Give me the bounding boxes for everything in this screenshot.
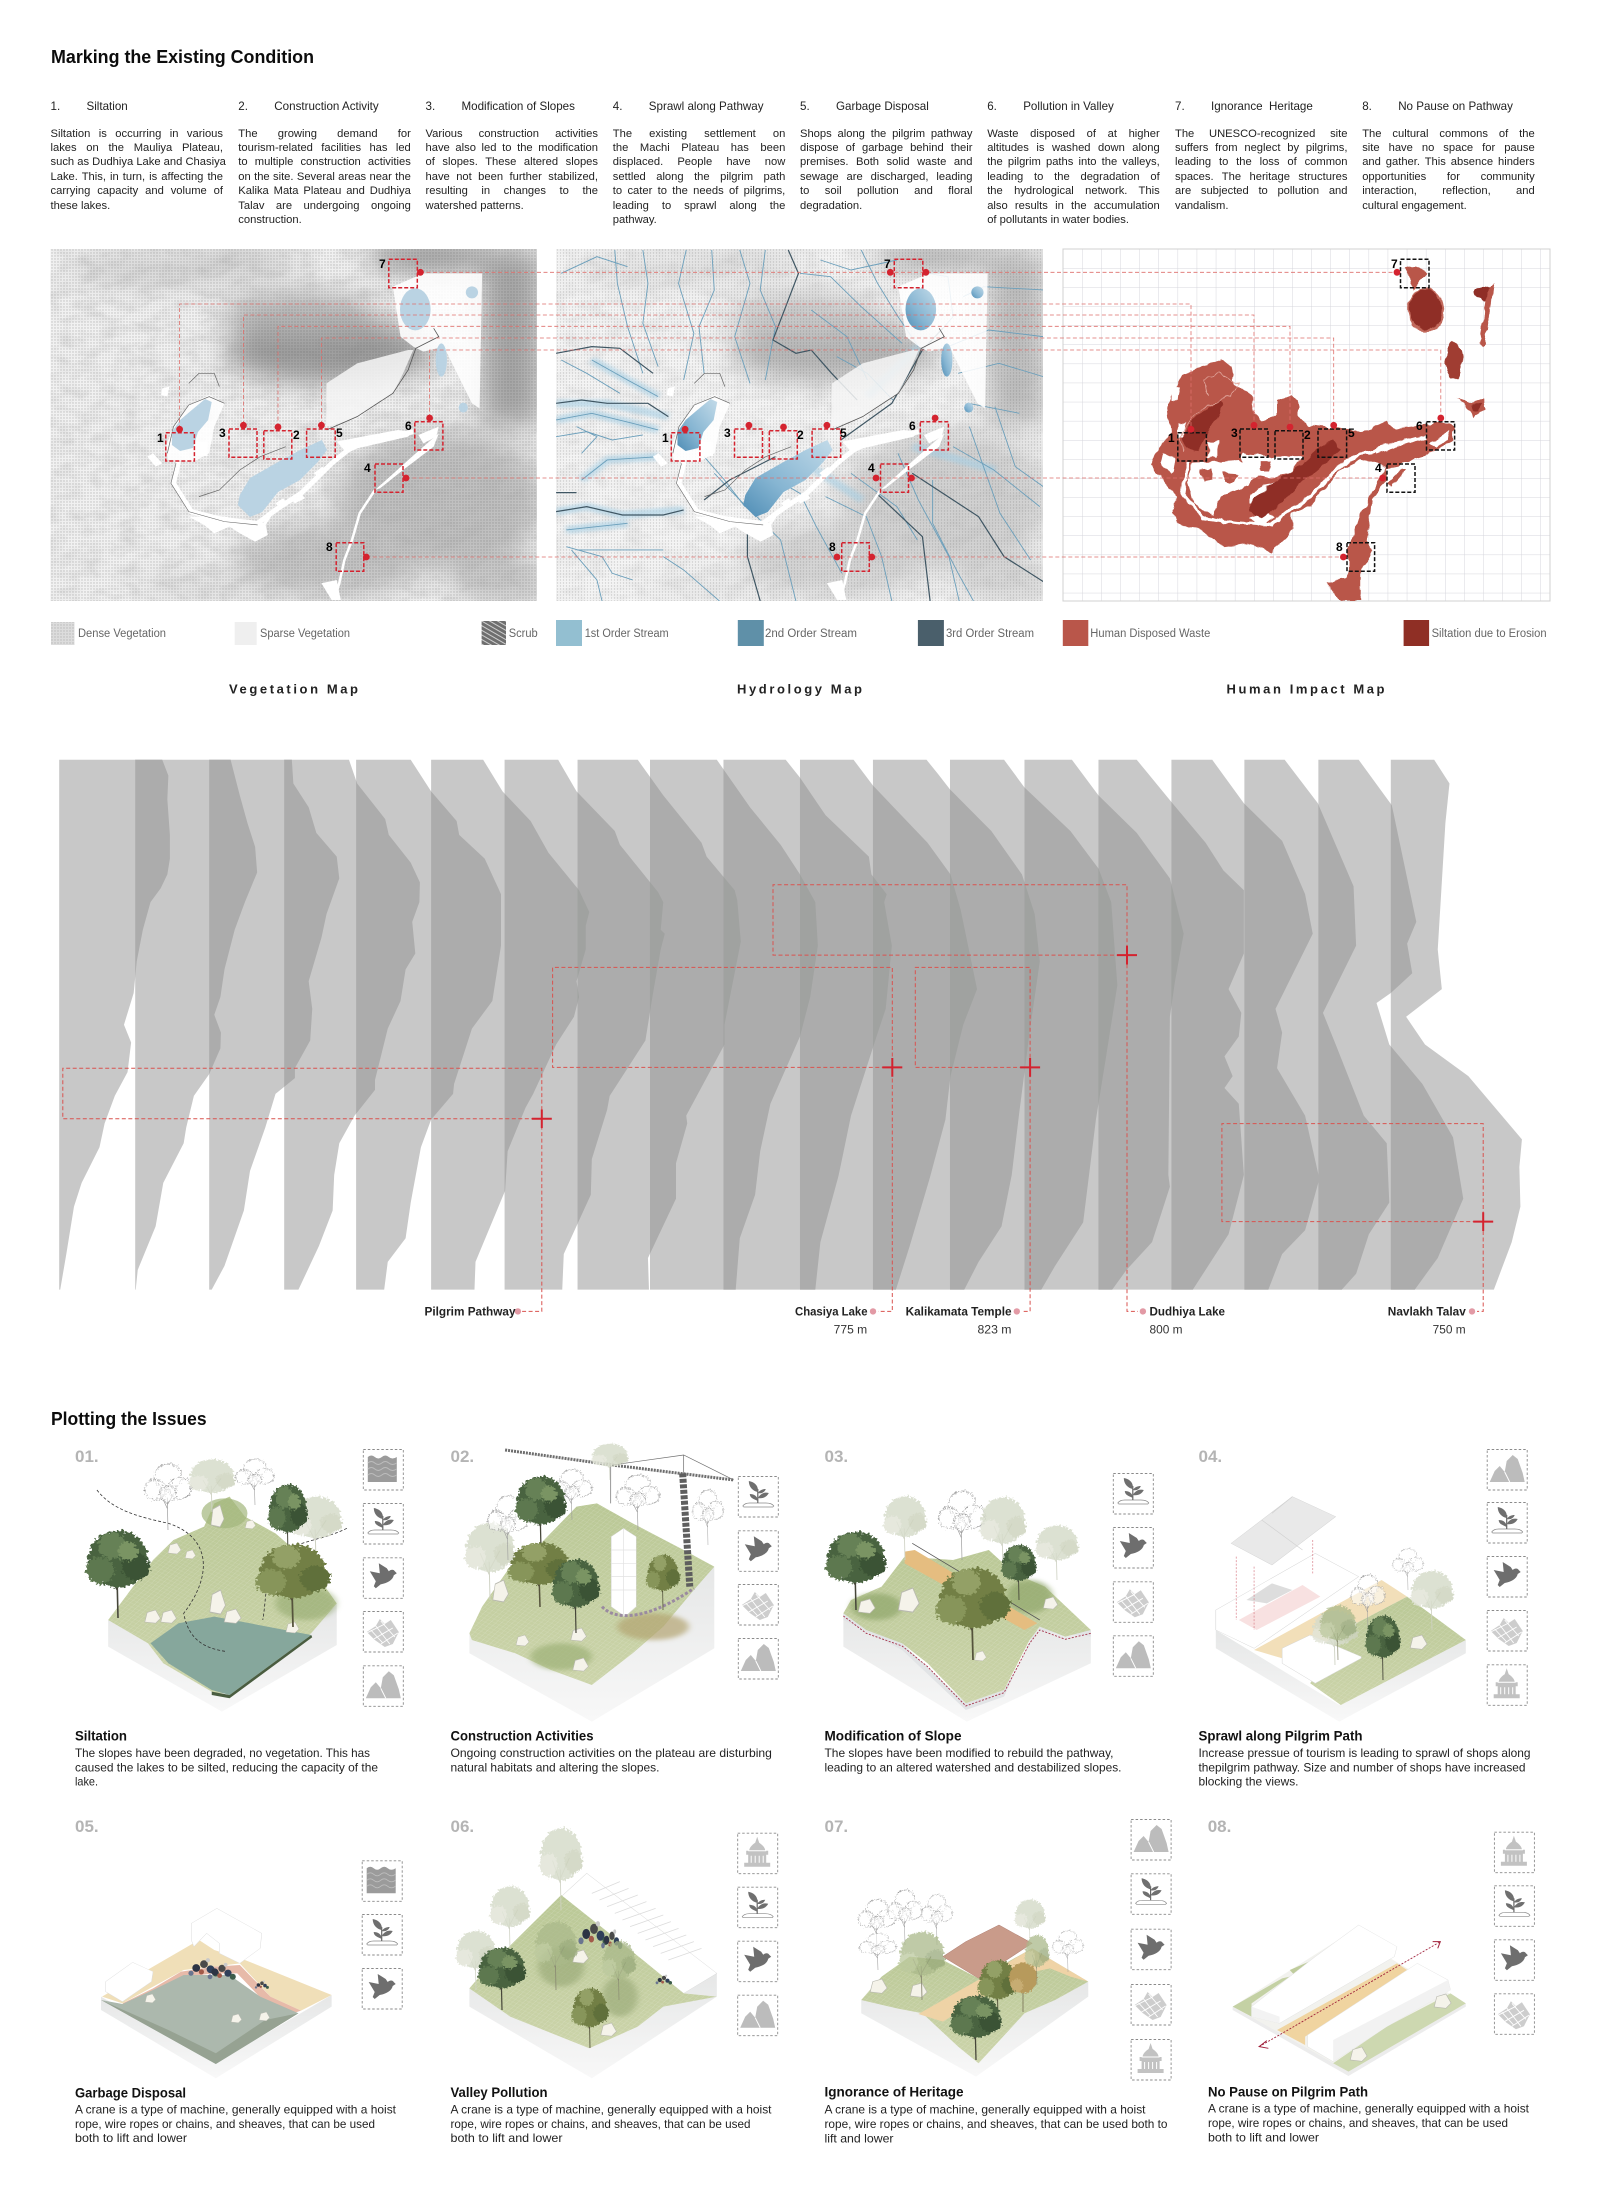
caption: valley pollution: Valley Pollution: [450, 2084, 548, 2100]
text column 8: no pause on pathway: site have no space for pause: [1362, 142, 1535, 154]
panel: 07 ignorance of heritage: [824, 1817, 1171, 2146]
text column 3: modification of slopes: watershed patterns.: [426, 200, 524, 212]
text column 1: siltation: these lakes.: [50, 200, 110, 212]
map titles: Vegetation Map: [229, 682, 360, 696]
legend: dense vegetation: [51, 622, 166, 645]
text column 6: pollution in valley: leading to the degradation of: [987, 171, 1160, 183]
illustration: valley block: [456, 1828, 717, 2078]
caption: sprawl along pilgrim path: [1198, 1728, 1530, 1789]
map markers: hydrology map: 1: [662, 431, 669, 445]
text column 2: construction activity: Construction Activity: [274, 100, 379, 113]
map markers: human impact map: 4: [1375, 461, 1382, 475]
text column 6: pollution in valley: [987, 100, 1160, 226]
map markers: vegetation map: [157, 257, 443, 571]
map markers: human impact map: 2: [1304, 428, 1311, 442]
caption: garbage disposal: both to lift and lower: [75, 2132, 187, 2145]
text column 7: ignorance heritage: The UNESCO-recognized site: [1175, 128, 1348, 140]
text column 2: construction activity: to multiple construction activities: [238, 156, 411, 168]
caption: modification of slope: leading to an altered watershed and destabilized slopes.: [824, 1761, 1122, 1774]
text column 4: sprawl along pathway: Sprawl along Pathway: [649, 100, 764, 113]
panel: 05 garbage disposal: 05.: [75, 1817, 99, 1836]
section label: kalikamata temple: 823 m: [978, 1324, 1012, 1336]
legend: human disposed waste: Human Disposed Waste: [1090, 628, 1210, 640]
text column 3: modification of slopes: Modification of Slopes: [462, 100, 575, 113]
text column 8: no pause on pathway: The cultural commons of the: [1362, 128, 1535, 140]
section label: dudhiya lake: Dudhiya Lake: [1150, 1306, 1225, 1318]
caption: modification of slope: [824, 1728, 1122, 1774]
map markers: vegetation map: 5: [336, 426, 343, 440]
text column 4: sprawl along pathway: the Machi Plateau has been: [613, 142, 785, 154]
text column 2: construction activity: 2.: [238, 100, 248, 113]
icons: impact categories: [738, 1833, 778, 2036]
illustration: construction block with crane: [465, 1444, 734, 1722]
text column 5: garbage disposal: Garbage Disposal: [836, 100, 929, 113]
legend: 3rd order stream: 3rd Order Stream: [946, 628, 1034, 640]
map markers: hydrology map: 5: [840, 426, 847, 440]
text column 8: no pause on pathway: [1362, 100, 1535, 212]
text column 2: construction activity: construction.: [238, 214, 302, 226]
map markers: human impact map: 6: [1416, 419, 1423, 433]
legend: scrub: [482, 621, 538, 645]
map markers: human impact map: 8: [1336, 540, 1343, 554]
legend: [51, 620, 1547, 646]
section label: chasiya lake: 775 m: [834, 1324, 867, 1336]
text column 1: siltation: such as Dudhiya Lake and Chasiya: [50, 156, 226, 168]
text column 8: no pause on pathway: cultural engagement.: [1362, 200, 1467, 212]
text column 2: construction activity: on the site. Several areas near the: [238, 171, 411, 183]
panel: 01 siltation: 01.: [75, 1447, 99, 1466]
caption: siltation: lake.: [75, 1776, 98, 1789]
text column 7: ignorance heritage: 7.: [1175, 100, 1185, 113]
text column 8: no pause on pathway: interaction, reflection, and: [1362, 185, 1535, 197]
text column 7: ignorance heritage: [1175, 100, 1348, 212]
map markers: human impact map: 7: [1391, 257, 1398, 271]
text column 1: siltation: [50, 100, 226, 212]
panel: 04 sprawl along pilgrim path: 04.: [1198, 1447, 1222, 1466]
legend: human disposed waste: [1063, 620, 1210, 646]
text column 6: pollution in valley: Waste disposed of at higher: [987, 128, 1160, 140]
legend: 2nd order stream: 2nd Order Stream: [765, 628, 857, 640]
text column 5: garbage disposal: [800, 100, 972, 212]
text column 3: modification of slopes: have not been further stabilized,: [426, 171, 598, 183]
legend: 2nd order stream: [738, 620, 857, 646]
text column 6: pollution in valley: the pilgrim paths into the valleys,: [987, 156, 1160, 168]
section locators: dashed frames and crosses: [63, 885, 1493, 1315]
text column 4: sprawl along pathway: to cater to the needs of pilgrims,: [613, 185, 785, 197]
panel: 02 construction activities: [450, 1444, 778, 1774]
text column 4: sprawl along pathway: [612, 100, 786, 226]
caption: no pause on pilgrim path: rope, wire ropes or chains, and sheaves, that can be used: [1208, 2117, 1508, 2130]
text column 3: modification of slopes: resulting in changes to the: [426, 185, 598, 197]
map markers: vegetation map: 6: [405, 419, 412, 433]
icons: impact categories: [738, 1476, 778, 1679]
caption: construction activities: Ongoing construction activities on the plateau are disturbing: [450, 1747, 772, 1760]
map markers: vegetation map: 1: [157, 431, 164, 445]
map markers: hydrology map: 3: [724, 426, 731, 440]
illustration: pilgrim path block: [1233, 1925, 1466, 2076]
illustration: slope block: [826, 1491, 1091, 1722]
map markers: vegetation map: 7: [379, 257, 386, 271]
text column 6: pollution in valley: of pollutants in water bodies.: [987, 214, 1129, 226]
map titles: Human Impact Map: [1226, 682, 1386, 696]
section label: kalikamata temple: Kalikamata Temple: [906, 1306, 1012, 1318]
section label: kalikamata temple: [906, 1306, 1012, 1336]
caption: valley pollution: A crane is a type of machine, generally equipped with a hoist: [450, 2104, 772, 2116]
legend: 1st order stream: 1st Order Stream: [585, 628, 669, 640]
caption: ignorance of heritage: lift and lower: [824, 2132, 894, 2146]
caption: ignorance of heritage: Ignorance of Heritage: [824, 2084, 964, 2100]
panel: 05 garbage disposal: [75, 1817, 402, 2145]
text column 2: construction activity: [238, 100, 411, 226]
map markers: vegetation map: 3: [219, 426, 226, 440]
section label: navlakh talav: Navlakh Talav: [1388, 1306, 1466, 1318]
icons: impact categories: [362, 1861, 402, 2009]
text column 4: sprawl along pathway: 4.: [613, 100, 622, 113]
panel: 06 valley pollution: 06.: [450, 1817, 474, 1836]
illustration: shops along the path: [1216, 1497, 1466, 1722]
legend: sparse vegetation: [235, 622, 350, 645]
text column 6: pollution in valley: Pollution in Valley: [1023, 100, 1114, 113]
text column 2: construction activity: Talav are undergoing ongoing: [238, 200, 411, 212]
text column 3: modification of slopes: of slopes. These altered slopes: [426, 156, 598, 168]
caption: construction activities: [450, 1728, 772, 1774]
panel: 04 sprawl along pilgrim path: [1198, 1447, 1530, 1789]
text column 1: siltation: 1.: [50, 100, 60, 113]
caption: sprawl along pilgrim path: thepilgrim pathway. Size and number of shops have increased: [1198, 1761, 1526, 1774]
text column 6: pollution in valley: also results in the accumulation: [987, 200, 1160, 212]
icons: impact categories: [1113, 1474, 1153, 1676]
legend: 3rd order stream: [918, 620, 1034, 646]
text column 6: pollution in valley: altitudes is washed down along: [987, 142, 1160, 154]
caption: no pause on pilgrim path: [1208, 2084, 1530, 2144]
text column 5: garbage disposal: to soil pollution and floral: [800, 185, 972, 197]
text column 1: siltation: lakes on the Mauliya Plateau,: [50, 142, 223, 154]
text column 7: ignorance heritage: spaces. The heritage structures: [1175, 171, 1348, 183]
panel: human impact map: [1063, 249, 1550, 601]
caption: sprawl along pilgrim path: Sprawl along Pilgrim Path: [1198, 1728, 1362, 1744]
panel: 06 valley pollution: [450, 1817, 778, 2145]
text column 5: garbage disposal: premises. Both solid waste and: [800, 156, 972, 168]
map markers: hydrology map: 7: [884, 257, 891, 271]
caption: modification of slope: The slopes have been modified to rebuild the pathway,: [824, 1747, 1114, 1760]
text column 3: modification of slopes: Various construction activities: [426, 128, 598, 140]
icons: impact categories: [1131, 1820, 1171, 2080]
caption: valley pollution: [450, 2084, 772, 2145]
text column 4: sprawl along pathway: The existing settlement on: [613, 128, 785, 140]
map markers: human impact map: [1168, 257, 1455, 571]
text column 6: pollution in valley: 6.: [987, 100, 997, 113]
text column 7: ignorance heritage: Ignorance Heritage: [1211, 100, 1313, 113]
caption: garbage disposal: rope, wire ropes or chains, and sheaves, that can be used: [75, 2118, 375, 2131]
map markers: vegetation map: 2: [293, 428, 300, 442]
map markers: human impact map: 3: [1231, 426, 1238, 440]
panel: hydrology map: [556, 249, 1043, 601]
caption: no pause on pilgrim path: A crane is a type of machine, generally equipped with a hoist: [1208, 2103, 1530, 2116]
icons: impact categories: [1487, 1450, 1527, 1705]
panel: 08 no pause on pilgrim path: 08.: [1208, 1817, 1231, 1836]
map markers: human impact map: 5: [1348, 426, 1355, 440]
caption: siltation: The slopes have been degraded, no vegetation. This has: [75, 1747, 370, 1760]
caption: valley pollution: both to lift and lower: [450, 2132, 563, 2145]
section label: pilgrim pathway: Pilgrim Pathway: [424, 1306, 516, 1318]
panel: vegetation map: [50, 249, 537, 601]
caption: ignorance of heritage: A crane is a type of machine, generally equipped with a hoist: [824, 2104, 1146, 2117]
text column 3: modification of slopes: 3.: [426, 100, 435, 113]
connector lines between maps: [180, 272, 1441, 557]
panel: 08 no pause on pilgrim path: [1208, 1817, 1534, 2144]
text column 4: sprawl along pathway: pathway.: [613, 214, 657, 226]
caption: garbage disposal: Garbage Disposal: [75, 2084, 186, 2100]
text column 7: ignorance heritage: vandalism.: [1175, 200, 1228, 212]
map markers: hydrology map: 2: [797, 428, 804, 442]
text column 2: construction activity: The growing demand for: [238, 128, 411, 140]
site section strips: [59, 760, 1522, 1290]
map markers: hydrology map: 4: [868, 461, 875, 475]
icons: impact categories: [363, 1450, 403, 1706]
text column 5: garbage disposal: 5.: [800, 100, 810, 113]
section label: chasiya lake: [795, 1306, 868, 1336]
caption: sprawl along pilgrim path: blocking the views.: [1198, 1776, 1298, 1789]
caption: construction activities: Construction Activities: [450, 1728, 594, 1744]
text column 6: pollution in valley: the hydrological network. This: [987, 185, 1160, 197]
legend: scrub: Scrub: [509, 628, 538, 640]
caption: siltation: caused the lakes to be silted, reducing the capacity of the: [75, 1761, 378, 1774]
text column 3: modification of slopes: have also led to the modification: [426, 142, 598, 154]
caption: garbage disposal: A crane is a type of machine, generally equipped with a hoist: [75, 2104, 397, 2116]
illustration: heritage block: [858, 1890, 1088, 2077]
map grid: [1063, 249, 1550, 601]
legend: sparse vegetation: Sparse Vegetation: [260, 628, 350, 640]
text column 4: sprawl along pathway: displaced. People have now: [613, 156, 785, 168]
title: marking the existing condition: Marking the Existing Condition: [51, 46, 314, 67]
caption: ignorance of heritage: rope, wire ropes or chains, and sheaves, that can be used both to: [824, 2118, 1168, 2131]
caption: valley pollution: rope, wire ropes or chains, and sheaves, that can be used: [450, 2118, 750, 2131]
text column 1: siltation: Siltation is occurring in various: [50, 128, 223, 140]
section label: dudhiya lake: [1150, 1306, 1225, 1336]
text column 4: sprawl along pathway: leading to sprawl along the: [613, 200, 785, 212]
panel: 01 siltation: [75, 1447, 403, 1789]
map titles: Hydrology Map: [737, 682, 864, 696]
caption: garbage disposal: [75, 2084, 397, 2145]
text column 5: garbage disposal: Shops along the pilgrim pathway: [800, 128, 972, 140]
text column 1: siltation: Siltation: [86, 100, 128, 113]
section label: navlakh talav: [1388, 1306, 1466, 1336]
text column 7: ignorance heritage: are subjected to pollution and: [1175, 185, 1348, 197]
caption: no pause on pilgrim path: both to lift and lower: [1208, 2131, 1319, 2144]
illustration: garbage block: [101, 1908, 332, 2078]
icons: impact categories: [1494, 1832, 1534, 2034]
text column 5: garbage disposal: sewage are discharged, leading: [800, 171, 972, 183]
map markers: hydrology map: [662, 257, 948, 571]
section label: chasiya lake: Chasiya Lake: [795, 1306, 868, 1318]
legend: 1st order stream: [556, 620, 669, 646]
caption: siltation: Siltation: [75, 1728, 127, 1744]
text column 5: garbage disposal: degradation.: [800, 200, 862, 212]
panel: 03 modification of slope: [824, 1447, 1153, 1774]
illustration: siltation block: [86, 1459, 347, 1712]
text column 8: no pause on pathway: and gather. This absence hinders: [1362, 156, 1535, 168]
legend: siltation due to erosion: [1404, 620, 1547, 646]
section label: dudhiya lake: 800 m: [1150, 1324, 1182, 1336]
section label: navlakh talav: 750 m: [1433, 1324, 1466, 1336]
text column 3: modification of slopes: [426, 100, 598, 212]
text column 2: construction activity: tourism-related facilities has led: [238, 142, 411, 154]
map markers: hydrology map: 6: [909, 419, 916, 433]
caption: ignorance of heritage: [824, 2084, 1168, 2146]
text column 1: siltation: carrying capacity and volume of: [50, 185, 223, 197]
caption: siltation: [75, 1728, 378, 1789]
map markers: human impact map: 1: [1168, 431, 1175, 445]
human disposed waste and siltation shapes: [1149, 265, 1494, 601]
text column 8: no pause on pathway: opportunities for community: [1362, 171, 1535, 183]
caption: construction activities: natural habitats and altering the slopes.: [450, 1761, 660, 1774]
map markers: hydrology map: 8: [829, 540, 836, 554]
legend: dense vegetation: Dense Vegetation: [78, 628, 166, 640]
text column 5: garbage disposal: dispose of garbage behind their: [800, 142, 972, 154]
text column 8: no pause on pathway: No Pause on Pathway: [1398, 100, 1513, 113]
text column 7: ignorance heritage: suffers from neglect by pilgrims,: [1175, 142, 1348, 154]
legend: siltation due to erosion: Siltation due to Erosion: [1432, 628, 1547, 640]
text column 1: siltation: Lake. This, in turn, is affecting the: [50, 171, 223, 183]
heading: plotting the issues: Plotting the Issues: [51, 1408, 207, 1429]
text column 8: no pause on pathway: 8.: [1362, 100, 1372, 113]
map markers: vegetation map: 4: [364, 461, 371, 475]
caption: no pause on pilgrim path: No Pause on Pilgrim Path: [1208, 2084, 1368, 2100]
caption: sprawl along pilgrim path: Increase pressue of tourism is leading to sprawl of shops along: [1198, 1747, 1530, 1760]
panel: 07 ignorance of heritage: 07.: [824, 1817, 848, 1836]
panel: 02 construction activities: 02.: [450, 1447, 474, 1466]
text column 4: sprawl along pathway: settled along the pilgrim path: [613, 171, 785, 183]
map markers: vegetation map: 8: [326, 540, 333, 554]
text column 2: construction activity: Kalika Mata Plateau and Dudhiya: [238, 185, 411, 197]
text column 7: ignorance heritage: leading to the loss of common: [1175, 156, 1348, 168]
map titles: [229, 682, 1386, 696]
caption: modification of slope: Modification of Slope: [824, 1728, 962, 1744]
panel: 03 modification of slope: 03.: [824, 1447, 848, 1466]
